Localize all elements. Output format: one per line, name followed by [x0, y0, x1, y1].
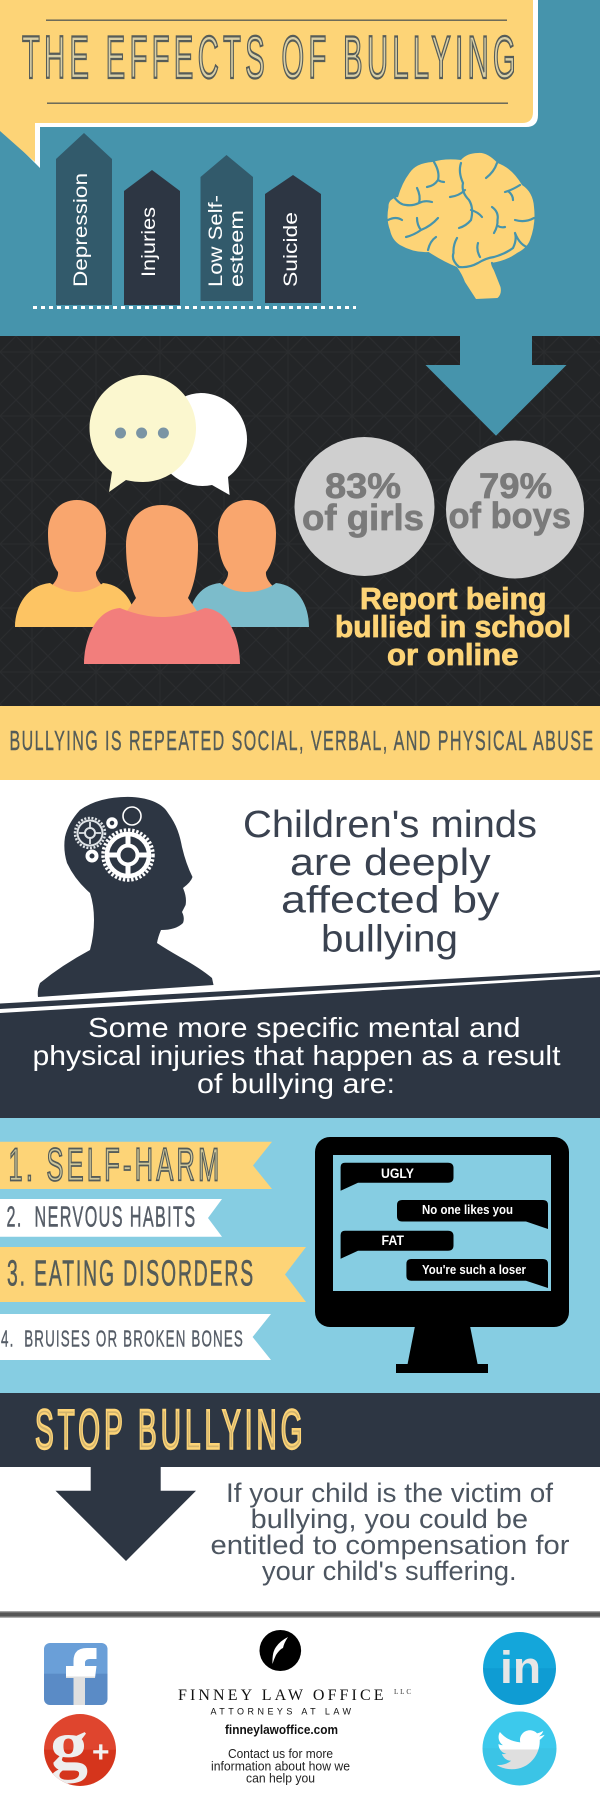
message: UGLY — [341, 1163, 454, 1191]
text: report being bullied: bullied in school — [335, 609, 571, 644]
icon: brain — [388, 153, 534, 299]
chart: effects arrows — [56, 133, 321, 305]
panel: teal header background — [0, 0, 600, 337]
arrow: navy down arrow — [56, 1467, 196, 1561]
panel: light blue injuries list — [0, 1118, 600, 1393]
text: report being bullied — [335, 581, 571, 672]
text: injuries intro: physical injuries that happen as a result — [32, 1040, 561, 1071]
ribbon: nervous habits — [0, 1199, 222, 1237]
arrow: low self-esteem — [200, 155, 253, 301]
arrow: teal down arrow — [426, 336, 566, 436]
text: contact message: Contact us for more — [228, 1747, 333, 1761]
heading: stop bullying: STOP BULLYING — [35, 1398, 306, 1460]
arrow: low self-esteem: Low Self- — [206, 195, 227, 287]
text: injuries intro — [32, 1012, 561, 1099]
ribbon: eating disorders: 3. EATING DISORDERS — [7, 1253, 255, 1294]
icon: linkedin — [483, 1632, 556, 1705]
message: No one likes you: No one likes you — [422, 1202, 513, 1217]
arrow: injuries: Injuries — [139, 207, 160, 277]
arrow: depression — [56, 133, 112, 305]
text: children's minds: are deeply — [290, 842, 491, 884]
text: injuries intro: of bullying are: — [197, 1068, 395, 1099]
text: compensation message: bullying, you could be — [251, 1504, 528, 1534]
person: right — [188, 500, 309, 627]
message: You're such a loser: You're such a loser — [422, 1262, 526, 1277]
text: children's minds — [243, 804, 537, 961]
arrow: suicide: Suicide — [281, 212, 302, 287]
text: compensation message: your child's suffering. — [262, 1556, 517, 1586]
arrow: suicide — [265, 175, 321, 303]
arrow: depression: Depression — [71, 173, 92, 287]
panel: title speech bubble — [0, 0, 538, 168]
icon: people group — [15, 500, 309, 664]
message: FAT — [341, 1231, 454, 1259]
ribbon: self-harm: 1. SELF-HARM — [8, 1139, 223, 1191]
icon: large gear — [103, 830, 153, 880]
icon: google plus — [44, 1707, 116, 1786]
text: report being bullied: or online — [387, 637, 518, 672]
logo text: Finney Law Office — [178, 1687, 411, 1716]
icon: google plus: + — [92, 1736, 110, 1769]
person: centre — [84, 505, 240, 664]
banner: definition of bullying — [0, 706, 600, 780]
person: left — [15, 500, 136, 627]
ribbon: bruises or broken bones — [0, 1314, 271, 1360]
icon: speech bubbles — [90, 375, 247, 495]
icon: linkedin: in — [500, 1642, 541, 1693]
logo text: Finney Law Office: LLC — [394, 1688, 411, 1696]
ribbon: bruises or broken bones: 4. BRUISES OR BROKEN BONES — [1, 1326, 244, 1352]
ribbon: eating disorders — [0, 1247, 306, 1302]
message: UGLY: UGLY — [381, 1166, 414, 1181]
arrow: injuries — [124, 170, 180, 305]
stat: 79% of boys: of boys — [448, 495, 571, 536]
text: contact message — [211, 1747, 350, 1786]
text: children's minds: bullying — [321, 919, 458, 961]
stat: 83% of girls: of girls — [302, 497, 424, 538]
ribbon: nervous habits: 2. NERVOUS HABITS — [6, 1202, 196, 1234]
message: No one likes you — [397, 1200, 548, 1229]
ribbon: self-harm — [0, 1139, 272, 1191]
text: injuries intro: Some more specific mental and — [88, 1012, 520, 1043]
logo text: Finney Law Office: ATTORNEYS AT LAW — [210, 1706, 352, 1716]
icon: facebook — [44, 1643, 108, 1705]
text: children's minds: affected by — [281, 880, 499, 922]
text: compensation message: entitled to compensation for — [210, 1530, 570, 1560]
text: website: finneylawoffice.com — [225, 1723, 338, 1737]
text: contact message: information about how we — [211, 1760, 350, 1774]
icon: twitter — [482, 1712, 556, 1786]
panel: navy injuries intro — [0, 970, 600, 1118]
stat: 79% of boys: 79% — [479, 467, 552, 506]
message: You're such a loser — [406, 1259, 548, 1288]
text: report being bullied: Report being — [360, 581, 546, 616]
icon: feather logo — [260, 1630, 301, 1671]
icon: head silhouette with gears — [38, 797, 214, 997]
message: FAT: FAT — [382, 1233, 405, 1248]
panel: dark statistics section — [0, 336, 600, 706]
icon: computer monitor with messages — [315, 1137, 569, 1373]
stat: 79% of boys — [446, 440, 584, 578]
text: compensation message: If your child is the victim of — [226, 1478, 554, 1508]
text: compensation message — [210, 1478, 570, 1586]
stat: 83% of girls — [294, 437, 434, 576]
panel: stop bullying band — [0, 1393, 600, 1467]
stat: 83% of girls: 83% — [325, 467, 401, 506]
arrow: low self-esteem: esteem — [227, 210, 248, 287]
text: children's minds: Children's minds — [243, 804, 537, 846]
logo text: Finney Law Office: FINNEY LAW OFFICE — [178, 1687, 384, 1704]
text: contact message: can help you — [246, 1772, 315, 1786]
icon: small gear — [75, 818, 105, 848]
icon: google plus: g — [50, 1707, 88, 1784]
